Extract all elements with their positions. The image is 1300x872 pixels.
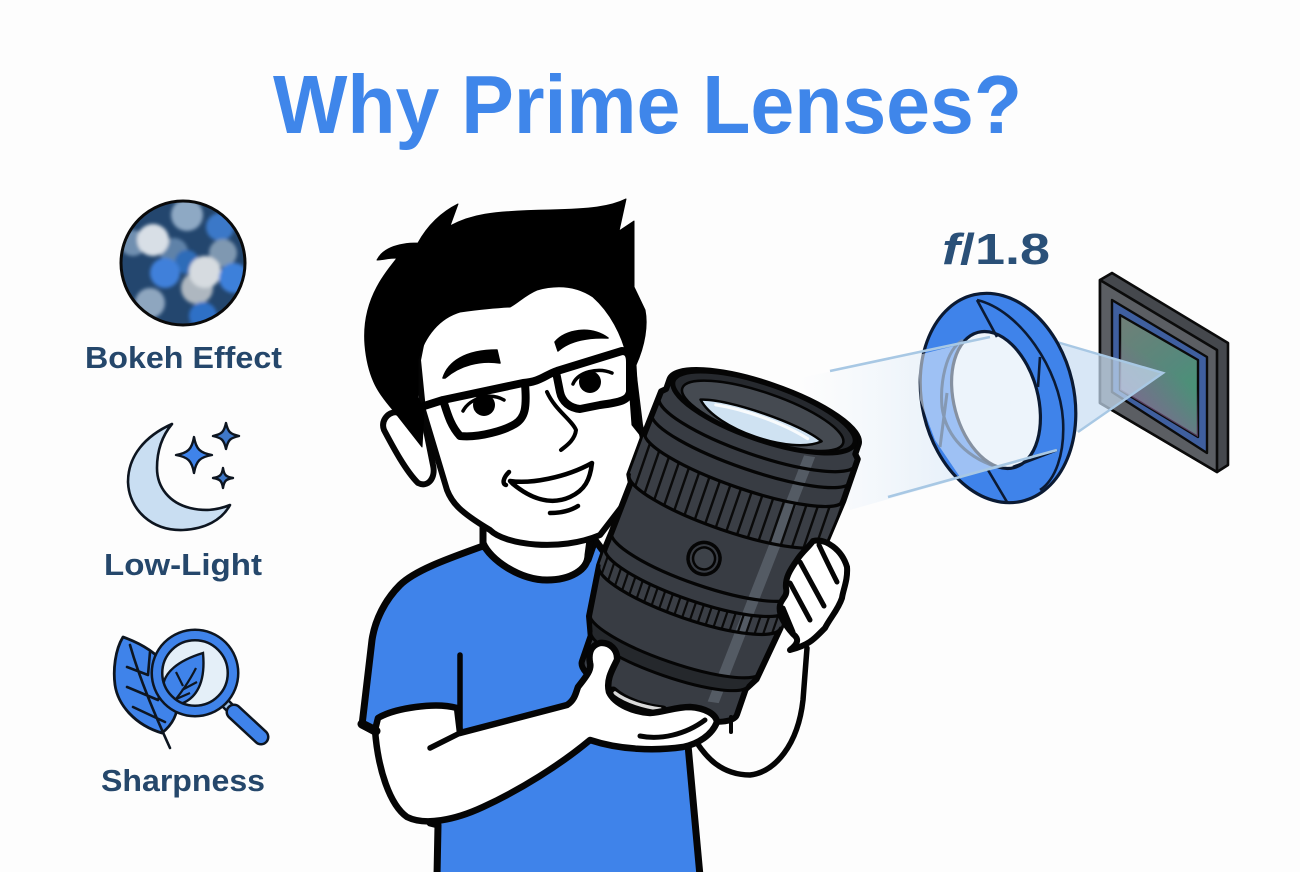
sensor chip: [1120, 315, 1198, 437]
right hand: [780, 541, 847, 650]
mouth corner and lower lip: [504, 472, 578, 513]
lens inner barrel: [675, 366, 851, 465]
label: sharpness: Sharpness: [101, 763, 265, 798]
ear: [383, 412, 434, 484]
sleeve cuff: [362, 724, 376, 731]
eyes: [463, 370, 612, 416]
aperture ring: [900, 278, 1096, 518]
icon: leaf: [114, 637, 178, 748]
aperture ring ribs: [598, 556, 806, 627]
sensor blue frame: [1112, 300, 1207, 453]
eyebrows: [443, 330, 608, 378]
lens aperture ring fill: [592, 548, 787, 649]
nose: [547, 392, 576, 450]
t-shirt: [362, 540, 700, 872]
icon: crescent moon: [128, 424, 230, 530]
lens barrel: [560, 351, 871, 746]
lens highlight strip: [708, 450, 815, 709]
hand fingers line: [640, 720, 705, 737]
left arm and hand: [362, 643, 717, 821]
lens base drip line: [729, 717, 733, 732]
camera lens: [578, 367, 862, 725]
light cone through aperture: [918, 337, 1012, 477]
lens front rim: [664, 354, 864, 470]
finger lines: [783, 545, 837, 632]
lens band lines: [591, 396, 856, 655]
lens dark band: [579, 613, 761, 705]
label: bokeh effect: Bokeh Effect: [85, 340, 282, 375]
shirt sleeve seam: [457, 655, 463, 733]
icon: bokeh circle: [120, 199, 249, 330]
icon: large star: [176, 437, 212, 473]
arm crease: [430, 733, 460, 748]
icon: small star: [213, 468, 233, 488]
icon: top star: [213, 423, 239, 449]
glasses: [424, 351, 630, 436]
benefit: bokeh effect: [85, 199, 282, 375]
focus ring ribs: [627, 471, 835, 542]
lens focus ring fill: [622, 432, 843, 564]
hair: [365, 199, 646, 447]
person: [362, 199, 877, 872]
label: low-light: Low-Light: [104, 547, 262, 582]
aperture opening: [937, 322, 1055, 478]
benefit: low-light: [104, 423, 262, 582]
ring inner rim: [977, 300, 1063, 490]
sensor: [1100, 273, 1228, 472]
ring body: [900, 278, 1096, 518]
light cone to sensor: [1050, 340, 1163, 432]
beam edge rays: [830, 337, 1057, 497]
lens glass: [695, 393, 824, 458]
benefit: sharpness: [101, 635, 265, 798]
icon: magnifying glass: [157, 635, 261, 737]
sensor front frame: [1100, 280, 1217, 472]
right arm: [697, 648, 807, 775]
lens button: [684, 538, 724, 579]
aperture blades: [977, 300, 1057, 502]
title: Why Prime Lenses?: [273, 58, 1022, 151]
lens rear silver element: [613, 691, 663, 710]
face: [418, 260, 650, 545]
f-number label: f/1.8: [942, 225, 1050, 274]
neck: [483, 525, 592, 580]
smile: [510, 463, 592, 501]
light beam: lens to aperture: [800, 337, 1060, 510]
sensor body: [1100, 273, 1228, 472]
glass highlight: [715, 402, 809, 439]
